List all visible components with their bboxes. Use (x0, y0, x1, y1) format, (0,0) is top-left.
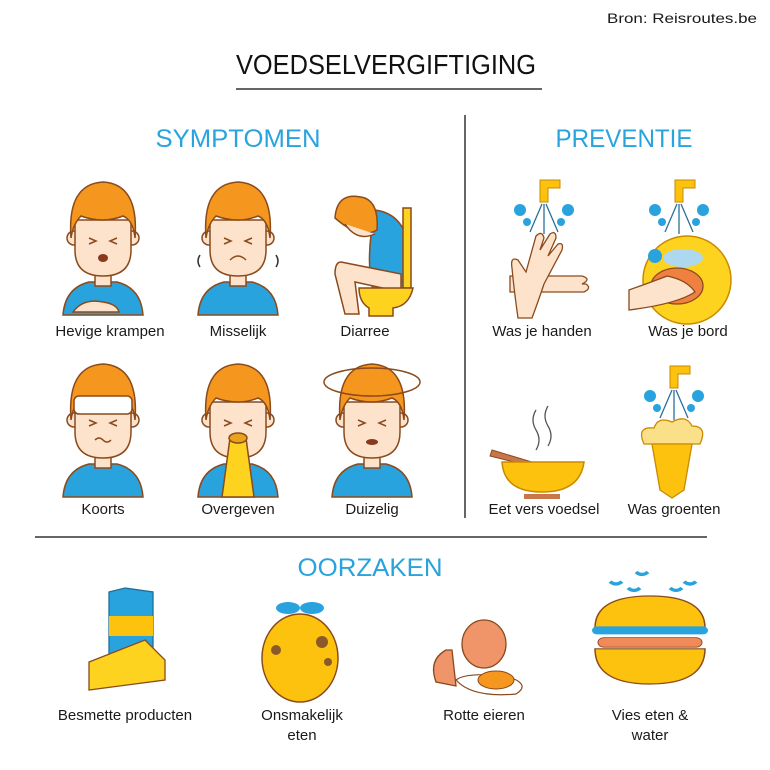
source note: Bron: Reisroutes.be (607, 10, 757, 26)
label: was je handen: Was je handen (492, 323, 592, 340)
icon: was je bord (629, 180, 731, 324)
title: VOEDSELVERGIFTIGING (236, 49, 536, 80)
label: rotte eieren: Rotte eieren (443, 707, 525, 724)
label: eet vers voedsel: Eet vers voedsel (489, 501, 599, 518)
panel: oorzaken: eten (287, 727, 317, 744)
icon: eet vers voedsel (490, 406, 584, 499)
icon: onsmakelijk eten (262, 602, 338, 702)
heading: symptomen: SYMPTOMEN (156, 125, 320, 153)
heading: oorzaken: OORZAKEN (298, 554, 442, 582)
icon: misselijk (198, 182, 278, 315)
label: misselijk: Misselijk (210, 323, 267, 340)
icon: duizelig (324, 364, 420, 497)
icon: overgeven (198, 364, 278, 497)
panel: preventie (489, 180, 731, 518)
label: was je bord: Was je bord (648, 323, 728, 340)
panel: symptomen (55, 182, 420, 518)
label: onsmakelijk eten: Onsmakelijk (261, 707, 343, 724)
label: was groenten: Was groenten (628, 501, 720, 518)
icon: besmette producten (89, 588, 165, 690)
icon: vies eten en water (592, 572, 708, 684)
heading: preventie: PREVENTIE (556, 125, 692, 153)
label: hevige krampen: Hevige krampen (55, 323, 165, 340)
icon: diarree (335, 196, 413, 316)
label: besmette producten: Besmette producten (58, 707, 192, 724)
label: duizelig: Duizelig (345, 501, 399, 518)
label: koorts: Koorts (81, 501, 125, 518)
icon: koorts (63, 364, 143, 497)
panel: oorzaken: water (631, 727, 668, 744)
label: vies eten en water: Vies eten & (612, 707, 688, 724)
panel: oorzaken (58, 572, 708, 744)
icon: hevige krampen (63, 182, 143, 315)
icon: was groenten (642, 366, 704, 498)
icon: rotte eieren (434, 620, 522, 695)
icon: was je handen (510, 180, 589, 318)
label: overgeven: Overgeven (201, 501, 275, 518)
label: diarree: Diarree (340, 323, 390, 340)
